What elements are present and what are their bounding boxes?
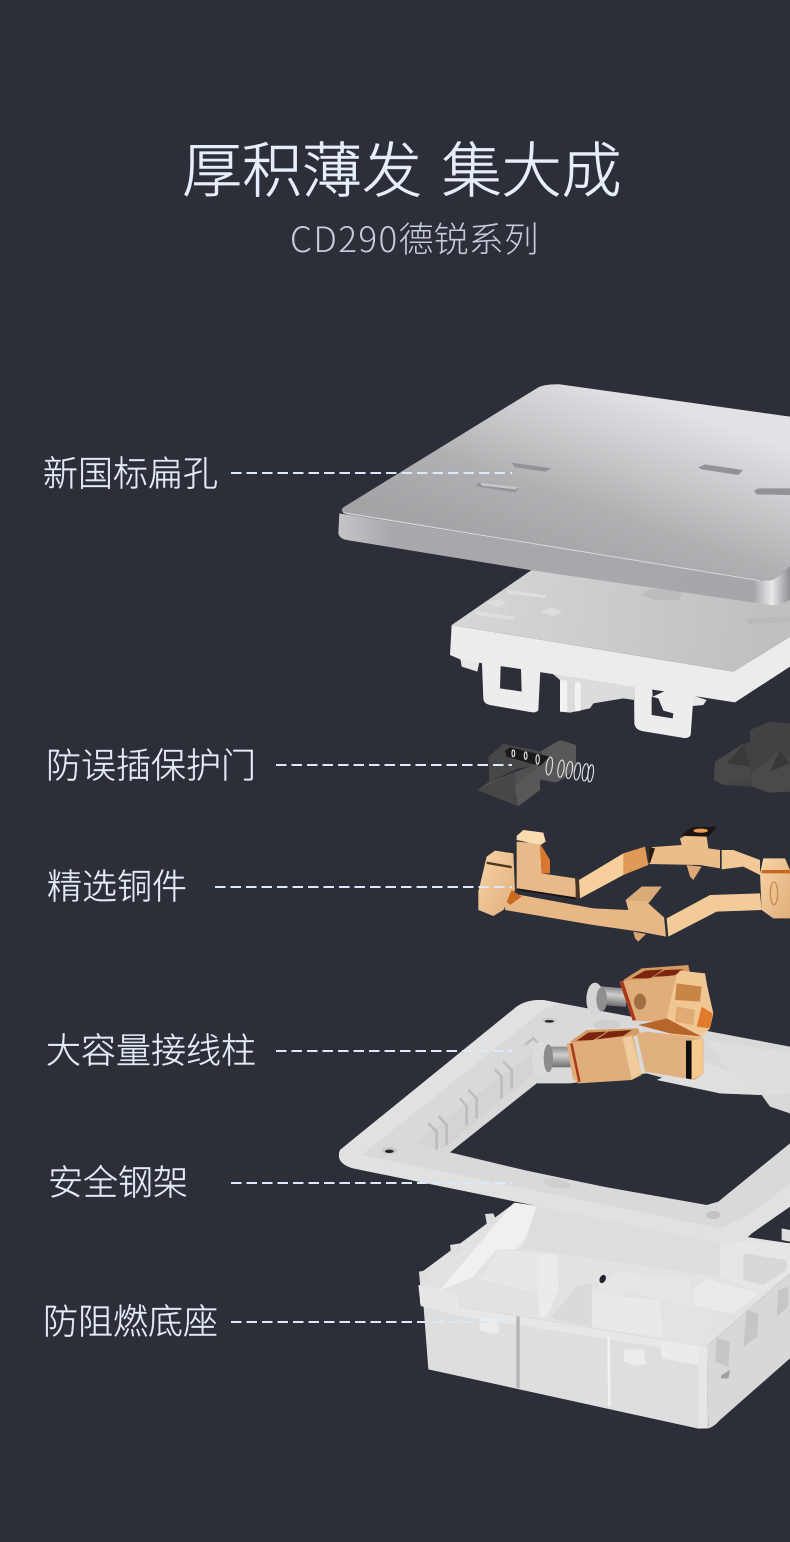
front screw	[532, 1042, 573, 1075]
label: safety steel frame: 安全钢架	[48, 1164, 188, 1203]
rear screw	[586, 983, 670, 1030]
copper contacts	[478, 827, 790, 942]
rear lugs	[419, 1213, 790, 1283]
label: selected copper: 精选铜件	[47, 868, 187, 907]
label: high-capacity terminal: 大容量接线柱	[46, 1032, 256, 1071]
right shutter	[714, 722, 790, 793]
spring	[512, 750, 595, 782]
cover mounting frame with clips	[338, 384, 790, 738]
label: flame-retardant base: 防阻燃底座	[43, 1303, 218, 1342]
terminals: high-capacity binding posts	[532, 965, 713, 1083]
silver face plate	[338, 384, 790, 605]
shutters: anti-misinsertion protective door	[477, 722, 790, 806]
leader line: base	[231, 1321, 512, 1323]
label: new national standard flat holes: 新国标扁孔	[43, 455, 218, 494]
rear copper clamp	[619, 965, 713, 1038]
left shutter	[477, 740, 576, 806]
leader line: copper	[215, 886, 512, 888]
clip parts under body	[460, 655, 707, 738]
white body	[450, 625, 790, 702]
subtitle: CD290德锐系列	[290, 212, 539, 263]
leader line: flat pin holes	[231, 472, 512, 474]
label: anti-misinsertion door: 防误插保护门	[46, 747, 256, 786]
front copper clamp	[567, 1018, 703, 1083]
base: flame-retardant housing	[418, 1203, 790, 1429]
leader line: steel bracket	[231, 1182, 512, 1184]
leader line: terminal	[276, 1050, 512, 1052]
leader line: shutter	[276, 764, 512, 766]
front wall	[423, 1303, 708, 1429]
right wall	[707, 1273, 790, 1428]
title: 厚积薄发 集大成	[182, 138, 622, 205]
frame: safety steel bracket	[339, 1000, 790, 1243]
